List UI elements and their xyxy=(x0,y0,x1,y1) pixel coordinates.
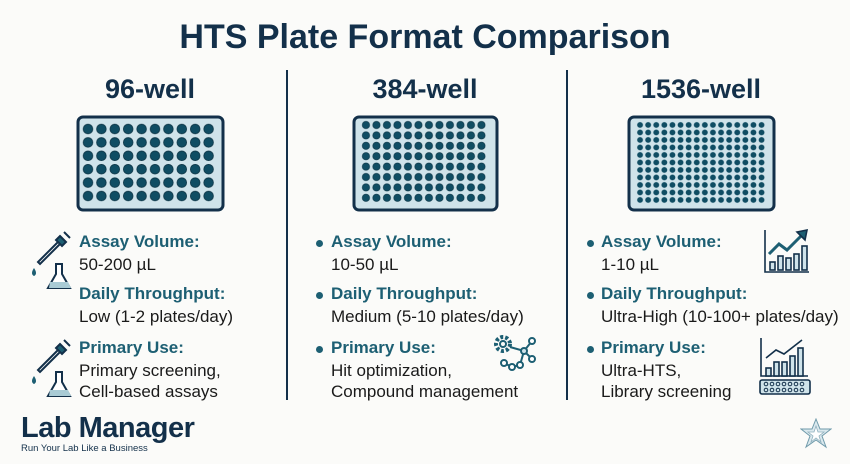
text: Daily Throughput: xyxy=(79,284,225,303)
column 3 text xyxy=(587,232,839,401)
text: 1-10 µL xyxy=(601,255,659,274)
text: Daily Throughput: xyxy=(331,284,477,303)
text: Daily Throughput: xyxy=(601,284,747,303)
text: Primary Use: xyxy=(79,338,184,357)
icon: gear network xyxy=(494,335,536,371)
column 1 text xyxy=(79,232,233,401)
plate: 384-well xyxy=(354,117,497,210)
heading: 96-well: 96-well xyxy=(105,74,195,104)
text: Ultra-High (10-100+ plates/day) xyxy=(601,307,839,326)
title: HTS Plate Format Comparison xyxy=(179,18,671,56)
text: 50-200 µL xyxy=(79,255,156,274)
icon: star badge xyxy=(800,418,832,448)
icon: pipette and flask 1 xyxy=(32,231,72,289)
text: Primary Use: xyxy=(601,338,706,357)
logo: Lab Manager: Lab Manager xyxy=(21,412,194,444)
text: Assay Volume: xyxy=(601,232,722,251)
icon: chart with plate xyxy=(759,338,811,395)
heading: 384-well: 384-well xyxy=(372,74,478,104)
text: Low (1-2 plates/day) xyxy=(79,307,233,326)
text: 10-50 µL xyxy=(331,255,398,274)
plate: 96-well xyxy=(78,117,223,210)
text: Compound management xyxy=(331,382,518,401)
plates xyxy=(76,116,776,212)
text: Hit optimization, xyxy=(331,361,452,380)
heading: 1536-well: 1536-well xyxy=(641,74,761,104)
text: Assay Volume: xyxy=(331,232,452,251)
icon: growth chart xyxy=(764,229,809,273)
text: Primary Use: xyxy=(331,338,436,357)
text: Assay Volume: xyxy=(79,232,200,251)
column 2 text xyxy=(316,232,524,401)
icon: pipette and flask 2 xyxy=(32,339,72,397)
logo: Lab Manager: Run Your Lab Like a Business xyxy=(21,443,148,454)
text: Cell-based assays xyxy=(79,382,218,401)
text: Library screening xyxy=(601,382,731,401)
text: Medium (5-10 plates/day) xyxy=(331,307,524,326)
plate: 1536-well xyxy=(629,117,774,210)
text: Ultra-HTS, xyxy=(601,361,681,380)
text: Primary screening, xyxy=(79,361,221,380)
